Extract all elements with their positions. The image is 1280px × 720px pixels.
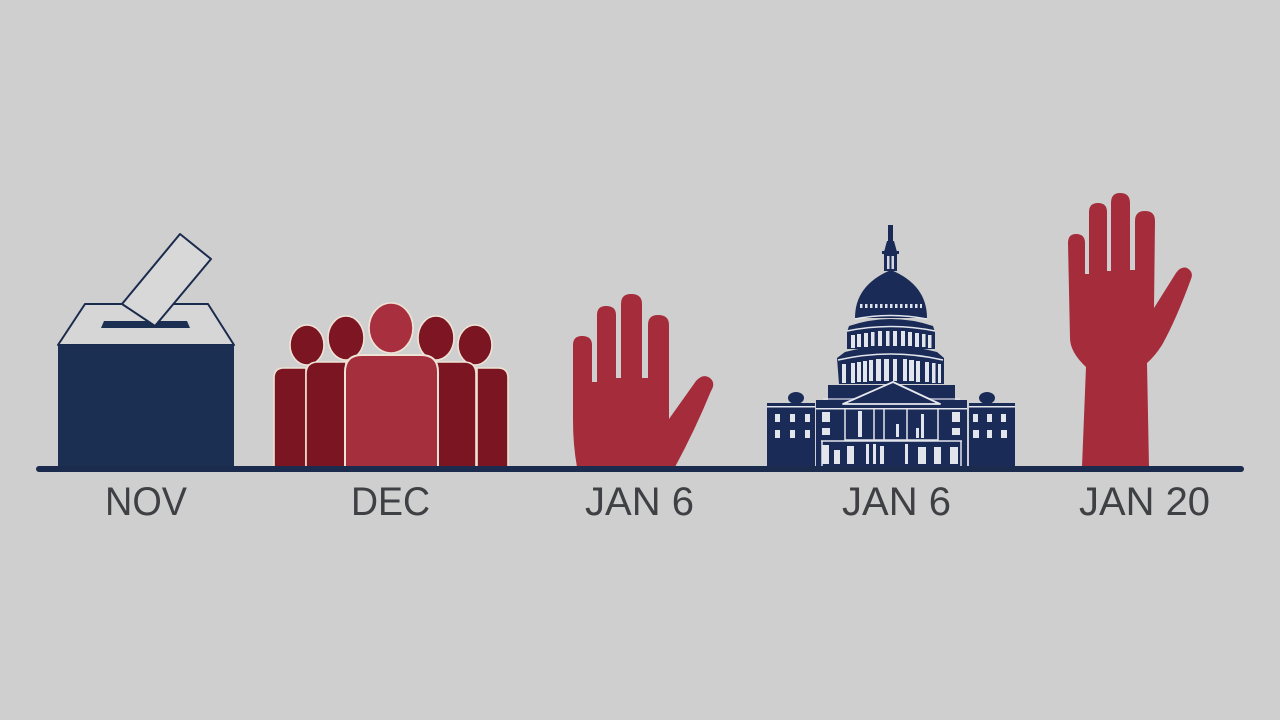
icon: group of people — [274, 303, 508, 467]
icon: tall raised hand — [1068, 193, 1192, 467]
central block — [816, 382, 967, 468]
upper drum — [847, 316, 935, 349]
dome windows — [860, 304, 922, 308]
icon: raised hand — [573, 294, 713, 467]
spire and lantern — [882, 225, 899, 271]
icon: capitol building — [767, 225, 1015, 468]
dome — [855, 270, 927, 318]
label: JAN 20: JAN 20 — [1079, 480, 1210, 524]
label: JAN 6 first: JAN 6 — [585, 480, 694, 524]
label: DEC: DEC — [351, 480, 430, 524]
label: JAN 6 second: JAN 6 — [842, 480, 951, 524]
lower drum — [837, 346, 944, 384]
timeline axis — [36, 466, 1244, 472]
label: NOV: NOV — [105, 480, 187, 524]
right wing — [969, 392, 1015, 468]
icon: ballot box — [58, 234, 234, 468]
left wing — [767, 392, 815, 468]
